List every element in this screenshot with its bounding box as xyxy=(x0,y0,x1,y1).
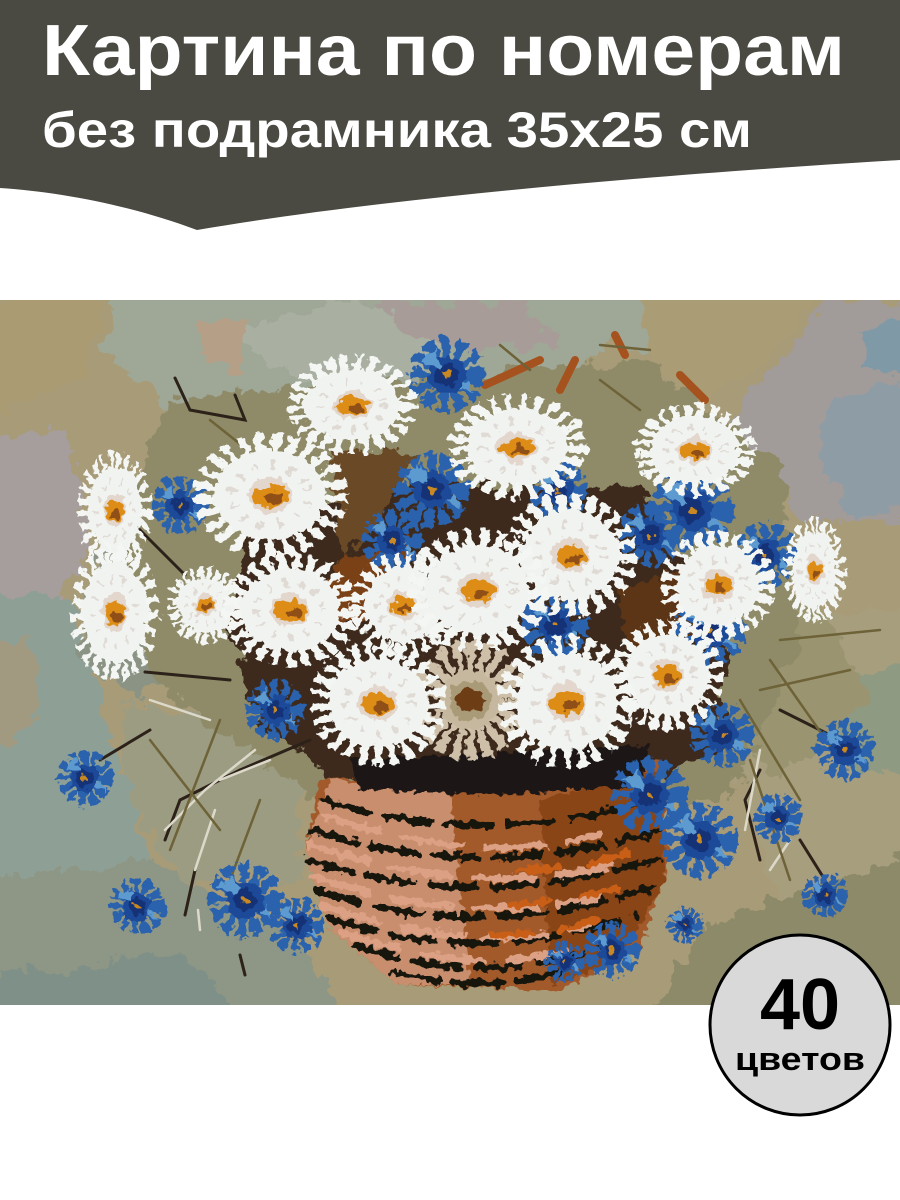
badge: number of colours xyxy=(710,935,890,1115)
grass stems xyxy=(100,335,880,975)
wicker basket xyxy=(305,745,670,990)
painting: daisies and cornflowers in a basket xyxy=(0,290,900,1020)
badge: number of colours: цветов xyxy=(735,1041,865,1077)
title: Картина по номерам xyxy=(42,11,845,91)
cornflowers xyxy=(65,348,867,975)
badge: number of colours: 40 xyxy=(760,965,840,1045)
dark foliage behind flowers xyxy=(225,450,730,790)
painting background: colour patches xyxy=(0,290,900,1020)
header banner xyxy=(0,0,900,230)
subtitle: без подрамника 35х25 см xyxy=(42,102,752,158)
daisies xyxy=(78,363,841,758)
